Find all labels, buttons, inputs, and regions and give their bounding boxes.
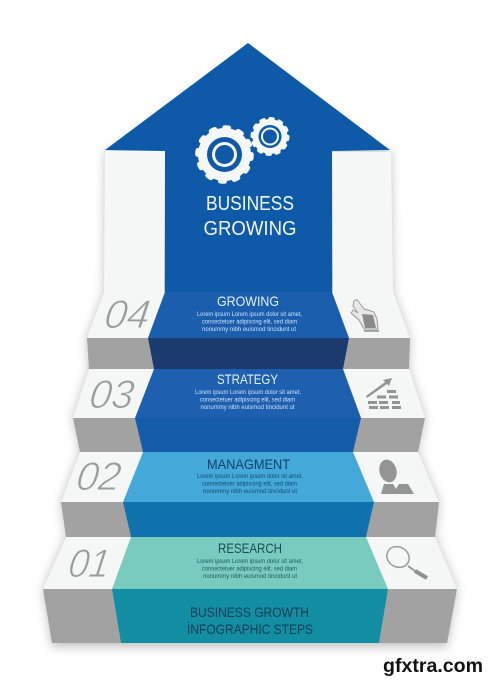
step 03 title: STRATEGY [217,371,279,387]
step 03 body text: Lorem ipsum Lorem ipsum dolor sit amet, [195,389,301,396]
step 01 teal riser [112,589,388,643]
step 02 body text: consectetuer adipiscing elit, sed diam [202,480,297,488]
step 02 tread [61,452,439,502]
arrow head and shaft [105,43,390,292]
panel: step 03 strategy [73,369,425,452]
step 02 number: 02 [74,454,124,499]
step 02 right riser [366,502,439,537]
footer caption: İNFOGRAPHIC STEPS [187,620,313,637]
step 04 number: 04 [102,292,153,337]
step 03 body text [195,389,301,411]
step 03 left riser [73,418,143,452]
heading: business growing: GROWING [204,218,296,240]
step 01 body text: consectetuer adipiscing elit, sed diam [202,566,297,572]
step 01 teal tread [112,537,388,589]
watermark: gfxtra.com [383,655,483,677]
panel: step 01 research [43,537,457,643]
step 02 body text: nonummy nibh euismod tincidunt ut [203,488,297,495]
step 02 blue tread [123,452,374,502]
right white column [332,152,393,292]
icon: small gear [252,119,288,154]
step 04 tread [87,292,410,338]
panel: step 02 managment [61,452,439,537]
step 03 blue riser [135,418,361,452]
step 04 body text: nonummy nibh euismod tincidunt ut [202,326,296,333]
step 03 body text: nonummy nibh euismod tincidunt ut [200,404,295,411]
icon: magnifying glass [383,543,427,578]
step 04 left riser [87,338,154,369]
panel: step 04 growing [87,292,410,369]
step 02 left riser [61,502,131,537]
step 03 number: 03 [87,372,137,417]
icon: growth chart [366,378,401,409]
step 03 blue tread [135,369,361,418]
icon: large gear [198,128,251,181]
step 01 body text: nonummy nibh euismod tincidunt ut [203,573,297,580]
step 04 body text: Lorem ipsum Lorem ipsum dolor sit amet, [197,311,302,318]
step 02 body text: Lorem ipsum Lorem ipsum dolor sit amet, [197,473,303,480]
step 03 right riser [353,418,425,452]
step 01 body text [197,558,303,580]
icon: pointing hand [351,300,379,332]
step 01 body text: Lorem ipsum Lorem ipsum dolor sit amet, [197,558,303,565]
step 04 blue tread [148,292,349,338]
step 01 right riser [379,589,457,643]
left white column [104,151,165,292]
step 03 body text: consectetuer adipiscing elit, sed diam [200,396,295,404]
step 02 body text [197,473,303,495]
step 01 number: 01 [66,541,113,586]
step 04 title: GROWING [217,293,279,309]
step 03 tread [73,369,425,418]
step 04 right riser [343,338,410,369]
step 04 body text [197,311,302,333]
panel: top arrow [104,43,393,292]
stair drop shadow [43,151,457,647]
step 02 title: MANAGMENT [207,456,290,472]
footer caption [187,604,313,637]
footer caption: BUSINESS GROWTH [190,604,309,620]
step 01 title: RESEARCH [218,540,282,556]
heading: business growing: BUSINESS [206,193,294,215]
step 02 blue riser [123,502,374,537]
step 01 tread [43,537,457,589]
heading: business growing [204,193,296,240]
step 04 body text: consectetuer adipiscing elit, sed diam [202,318,297,326]
step 04 blue riser [148,338,349,369]
step 01 left riser [43,589,121,643]
icon: business person [377,458,414,494]
